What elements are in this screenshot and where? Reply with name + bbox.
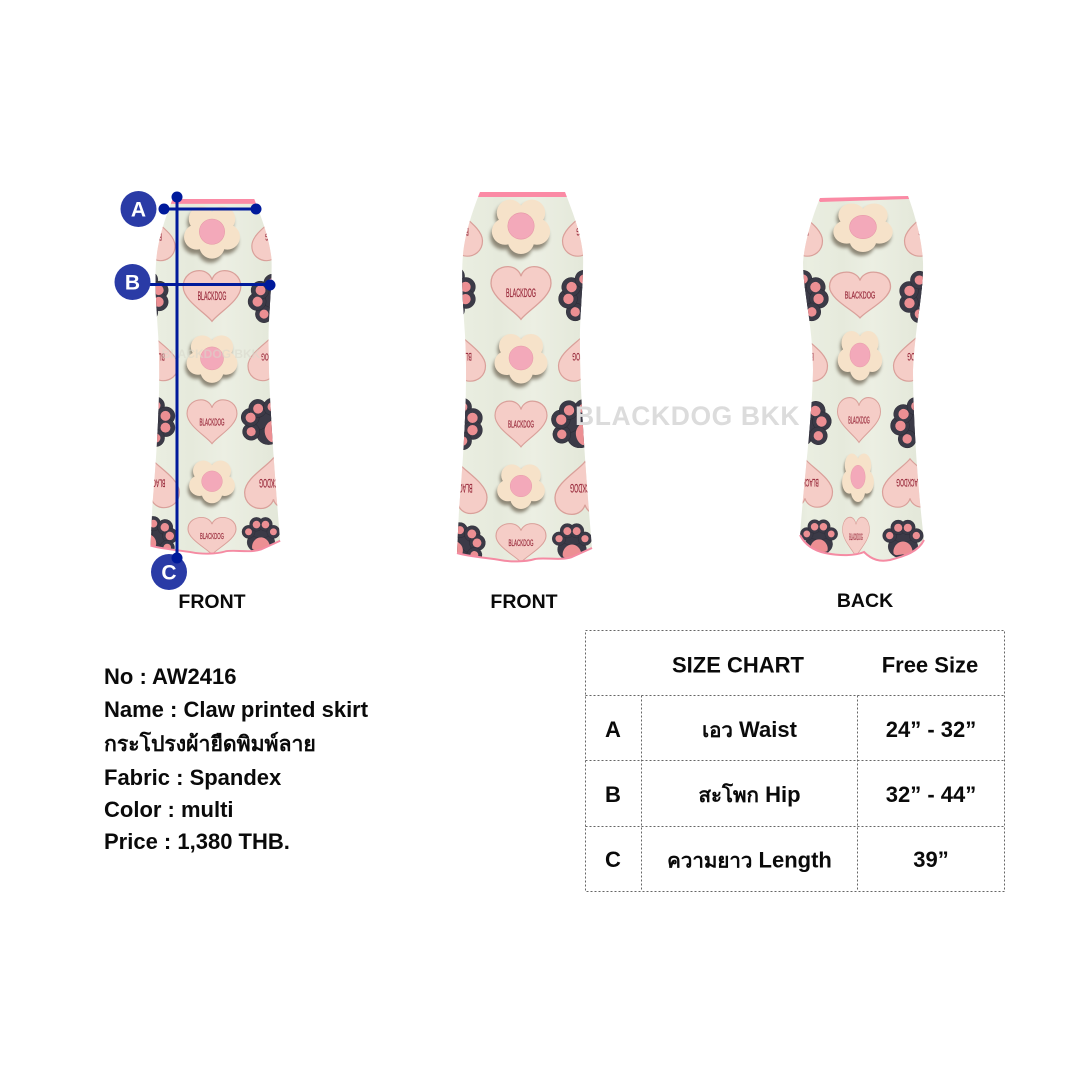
heart prints: BLACKDOG <box>572 350 600 362</box>
marker C <box>151 552 187 590</box>
skirt: front view small: BLACKDOG <box>198 291 226 303</box>
skirt: front view small: BLACKDOG <box>265 231 291 243</box>
heart prints: BLACKDOG <box>570 481 600 495</box>
heart prints back: BLACKDOG <box>907 350 935 362</box>
skirt: front view small: BLACKDOG <box>261 351 288 363</box>
heart prints back: BLACKDOG <box>848 414 870 426</box>
heart prints back: BLACKDOG <box>849 532 863 543</box>
skirt: front view small: BLACKDOG <box>200 417 225 428</box>
heart prints <box>459 220 590 560</box>
heart prints: BLACKDOG <box>508 538 534 548</box>
waist measure line A <box>158 204 262 214</box>
product image: front skirt with measurement guides <box>114 191 280 590</box>
row A: waist: 24” - 32” <box>886 717 976 742</box>
heart prints back: BLACKDOG <box>918 225 946 237</box>
row C: length: ความยาว Length <box>667 848 832 872</box>
marker B: B <box>125 272 140 294</box>
skirt: front view small: BLACKDOG <box>138 351 165 363</box>
caption: back: BACK <box>837 590 893 612</box>
product details text block <box>104 664 369 854</box>
product image: back skirt <box>799 196 925 562</box>
row C: length <box>605 847 949 872</box>
heart prints back: BLACKDOG <box>791 476 819 488</box>
fabric: Fabric : Spandex <box>104 765 282 790</box>
heart prints: BLACKDOG <box>576 225 604 237</box>
paw prints back <box>800 270 924 558</box>
header row <box>672 652 978 678</box>
paw prints <box>457 270 592 558</box>
row C: length: C <box>605 847 621 872</box>
marker C: C <box>161 562 177 584</box>
row B: hip <box>605 782 976 807</box>
flower prints <box>490 200 550 513</box>
heart prints: BLACKDOG <box>444 350 472 362</box>
Thai name: กระโปรงผ้ายืดพิมพ์ลาย <box>104 731 316 756</box>
heart prints: BLACKDOG <box>443 481 473 494</box>
size chart table <box>586 630 1004 892</box>
marker A <box>120 191 156 227</box>
product name: Name : Claw printed skirt <box>104 697 369 722</box>
marker A: A <box>131 198 146 222</box>
skirt: front view small <box>150 199 280 555</box>
heart prints back: BLACKDOG <box>781 225 809 237</box>
row B: hip: 32” - 44” <box>886 782 976 807</box>
product image: front skirt <box>456 192 592 562</box>
caption: front: FRONT <box>178 591 246 613</box>
product number: No : AW2416 <box>104 664 236 689</box>
heart prints back: BLACKDOG <box>786 350 814 362</box>
watermark on front skirt: BLACKDOG BKK <box>162 347 261 361</box>
row B: hip: สะโพก Hip <box>698 782 801 807</box>
flower prints back <box>832 203 893 506</box>
skirt: front view small: BLACKDOG <box>138 476 165 488</box>
heart prints back: BLACKDOG <box>845 290 875 301</box>
row A: waist: เอว Waist <box>702 717 798 742</box>
heart prints back: BLACKDOG <box>896 476 924 488</box>
row C: length: 39” <box>913 847 949 872</box>
caption: front 2: FRONT <box>490 591 558 613</box>
heart prints back <box>802 222 923 554</box>
heart prints: BLACKDOG <box>441 225 469 237</box>
skirt: front view small: BLACKDOG <box>135 231 162 243</box>
price: Price : 1,380 THB. <box>104 829 290 854</box>
skirt: front view small: BLACKDOG <box>200 531 224 541</box>
row A: waist <box>605 717 976 742</box>
header row: Free Size <box>882 652 978 678</box>
color: Color : multi <box>104 797 234 822</box>
row A: waist: A <box>605 717 621 742</box>
watermark: BLACKDOG BKK <box>575 401 800 431</box>
table grid <box>586 630 1004 892</box>
header row: SIZE CHART <box>672 652 805 678</box>
marker B <box>114 264 150 300</box>
heart prints: BLACKDOG <box>508 420 534 431</box>
heart prints: BLACKDOG <box>506 286 536 300</box>
length measure line C <box>172 192 182 558</box>
skirt: front view small: BLACKDOG <box>259 476 288 488</box>
row B: hip: B <box>605 782 621 807</box>
hip measure line B <box>140 280 276 290</box>
